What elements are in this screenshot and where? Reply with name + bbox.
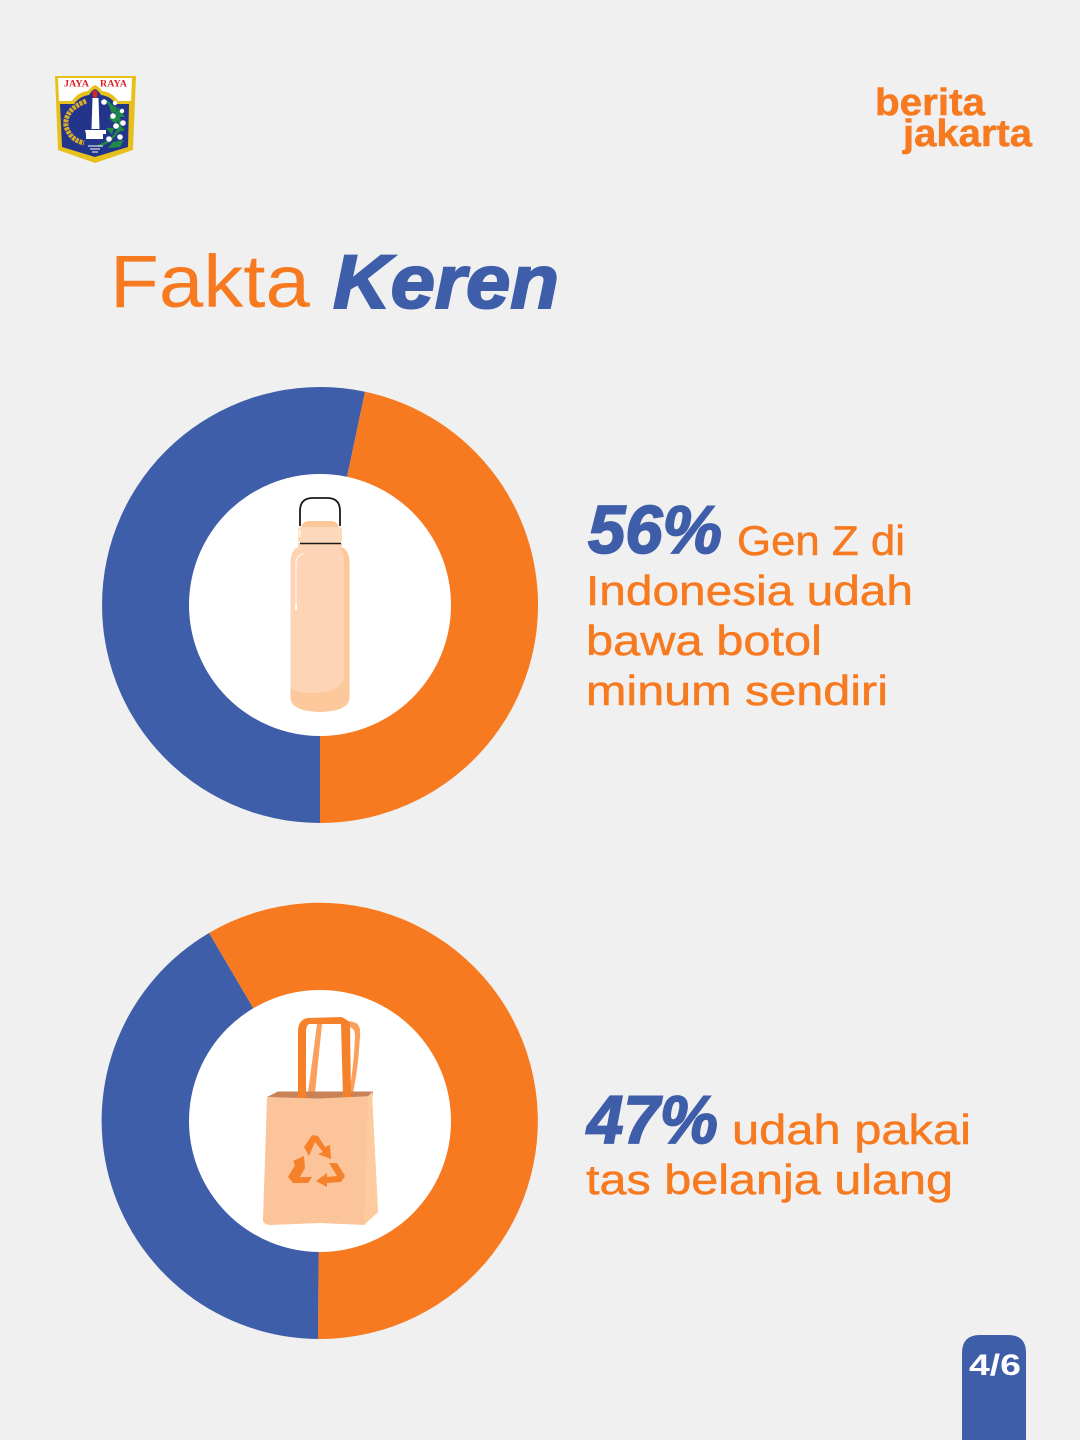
page indicator tab: 4/6 — [969, 1349, 1021, 1382]
title: Fakta — [110, 240, 311, 323]
icon: reusable tote bag — [263, 1017, 378, 1225]
text: 56 percent statement: Gen Z di — [737, 517, 905, 564]
panel: bottle statistic — [102, 387, 913, 823]
donut chart: 56 percent — [102, 387, 538, 823]
text: 56 percent statement — [586, 492, 913, 714]
text: 47 percent statement: 47% — [585, 1082, 718, 1158]
logo: berita jakarta: berita — [875, 82, 986, 124]
icon: Jakarta emblem: JAYA — [64, 78, 90, 88]
panel: bag statistic — [102, 903, 971, 1339]
title — [110, 240, 559, 325]
icon: water bottle — [290, 498, 350, 712]
title: Keren — [333, 240, 559, 325]
text: 47 percent statement — [585, 1082, 971, 1203]
logo: berita jakarta: jakarta — [902, 113, 1033, 155]
text: 56 percent statement: Indonesia udah — [586, 567, 913, 614]
icon: Jakarta emblem — [55, 76, 136, 163]
page indicator tab — [962, 1335, 1026, 1440]
icon: Jakarta emblem: RAYA — [100, 78, 128, 88]
logo: berita jakarta — [875, 82, 1033, 155]
text: 47 percent statement: udah pakai — [732, 1106, 971, 1153]
text: 47 percent statement: tas belanja ulang — [586, 1156, 953, 1203]
text: 56 percent statement: 56% — [588, 492, 722, 568]
text: 56 percent statement: bawa botol — [586, 617, 822, 664]
text: 56 percent statement: minum sendiri — [586, 667, 888, 714]
donut chart: 47 percent — [102, 903, 538, 1339]
